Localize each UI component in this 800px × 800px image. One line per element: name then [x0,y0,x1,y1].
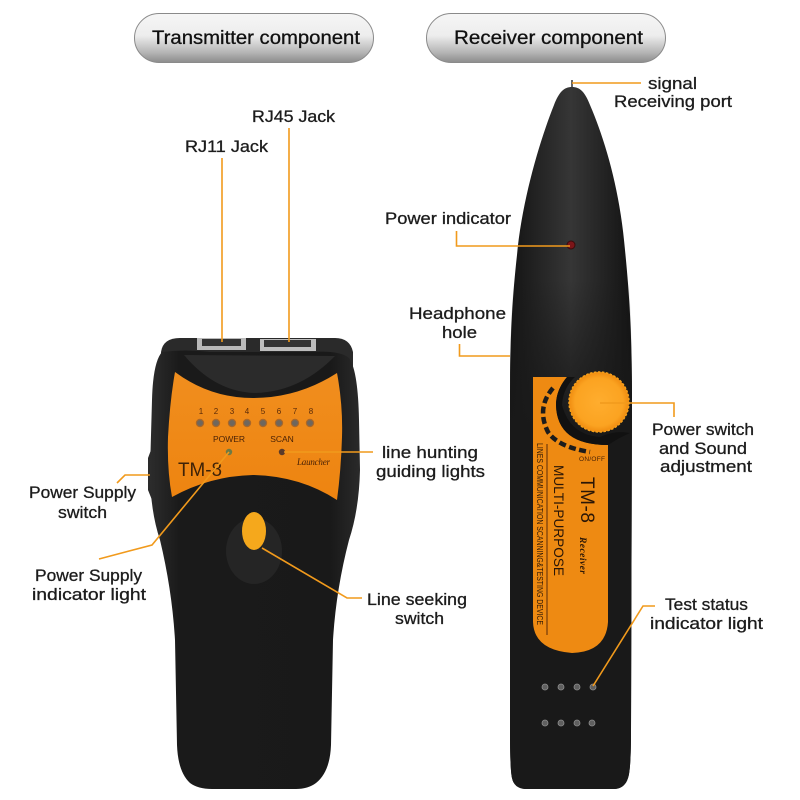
volume scale marks [543,388,590,452]
transmitter device [148,338,360,789]
label: test status indicator light: indicator light [650,615,763,633]
label: line seeking switch: Line seeking [367,591,467,609]
LED channel numbers: 6 [277,407,282,416]
model text TM-8: TM-8 [178,460,222,481]
heading: receiver component [426,14,666,62]
label: line hunting guiding lights: line hunting [382,444,478,462]
power and sound knob [569,372,629,432]
label: headphone hole: Headphone [409,305,506,323]
leader lines [99,83,674,686]
label: signal receiving port: Receiving port [614,93,732,111]
icon: RJ11 jack [197,338,246,350]
label: line seeking switch: switch [395,610,444,628]
label: headphone hole: hole [442,324,477,342]
button recess [226,518,282,584]
LED channel numbers: 2 [214,407,219,416]
label: power supply indicator light: Power Supply [35,567,143,585]
label: test status indicator light: Test status [665,596,748,614]
text MULTI-PURPOSE: MULTI-PURPOSE [551,465,566,576]
label: power switch and sound adjustment [652,421,754,476]
label: line seeking switch [367,591,467,628]
POWER label and light: POWER [213,434,245,444]
signal tip [571,80,573,88]
test status LEDs [542,684,596,726]
model text TM-8: TM-8 [576,477,597,523]
power indicator LED [567,241,575,249]
label: signal receiving port: signal [648,75,697,93]
LED channel numbers: 4 [245,407,250,416]
text Receiver: Receiver [577,536,587,574]
LED channel numbers: 7 [293,407,298,416]
heading: receiver component: Receiver component [454,28,644,49]
label: power switch and sound adjustment: Power switch [652,421,754,439]
label: line hunting guiding lights: guiding lights [376,463,485,481]
heading: transmitter component [134,14,374,62]
label: power indicator: Power indicator [385,210,512,228]
label: power supply switch [29,484,137,522]
text device description: LINES COMMUNICATION SCANNING&TESTING DEVICE [535,443,544,625]
divider line [546,444,548,635]
label: power supply switch: switch [58,504,107,522]
label: test status indicator light [650,596,763,633]
label: RJ45 Jack: RJ45 Jack [252,108,336,126]
brand text Launcher: Launcher [296,457,330,467]
ON/OFF text: ON/OFF [579,456,605,463]
label: power supply switch: Power Supply [29,484,137,502]
label: RJ11 Jack: RJ11 Jack [185,138,269,156]
label: power switch and sound adjustment: and Sound [659,440,747,458]
POWER label and light [213,434,245,455]
orange faceplate [168,372,342,500]
label: signal receiving port [614,75,732,111]
channel LEDs [196,419,314,427]
LED channel numbers: 5 [261,407,266,416]
icon: RJ45 jack [260,339,316,351]
lower body shading [510,280,632,789]
label: headphone hole [409,305,506,342]
receiver device [510,80,632,789]
dial groove [556,377,630,445]
line seeking button [242,512,266,550]
main body [150,350,360,789]
label: power switch and sound adjustment: adjustment [660,458,752,476]
receiver body [510,87,632,789]
LED channel numbers: 8 [309,407,314,416]
label: power supply indicator light [32,567,146,604]
side switch [148,450,152,500]
rear housing [161,338,353,372]
SCAN label and light: SCAN [270,434,294,444]
heading: transmitter component: Transmitter component [152,28,361,49]
label: line hunting guiding lights [376,444,485,481]
orange panel [533,377,608,653]
label: power supply indicator light: indicator light [32,586,146,604]
LED channel numbers: 3 [230,407,235,416]
top bevel [184,355,335,393]
SCAN label and light [270,434,294,455]
LED channel numbers: 1 [199,407,204,416]
LED channel numbers [199,407,314,416]
